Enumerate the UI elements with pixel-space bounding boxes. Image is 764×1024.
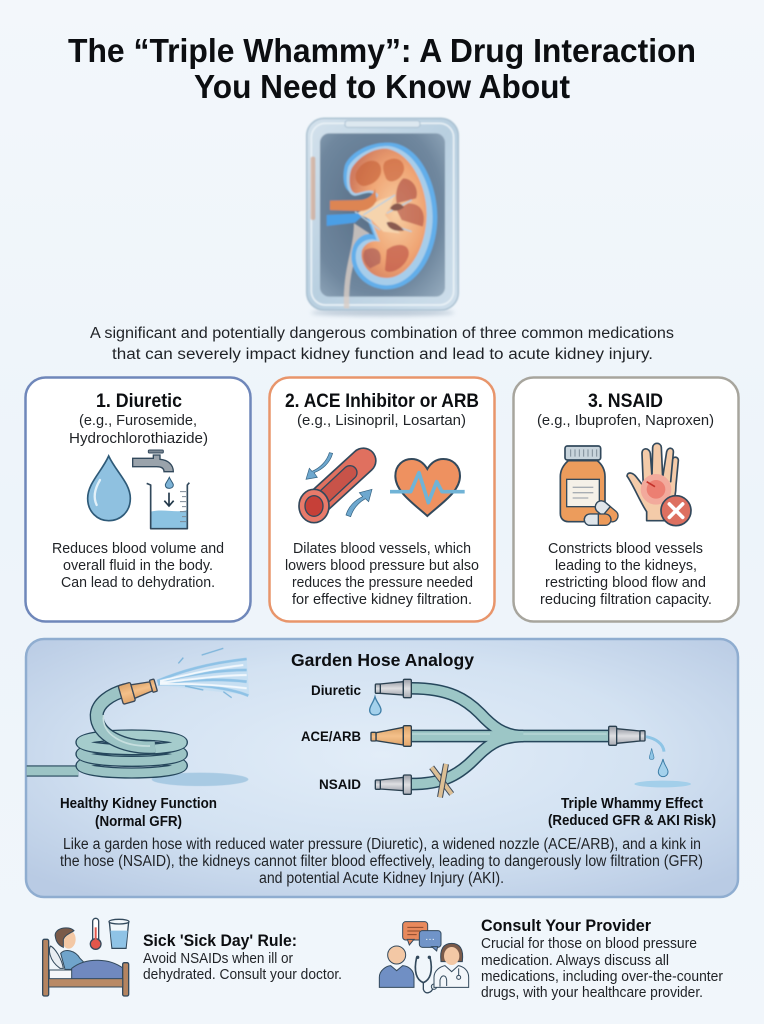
description: diuretic: Reduces blood volume and: [52, 541, 224, 557]
heading: sick day rule: Sick 'Sick Day' Rule:: [143, 931, 297, 950]
heading: diuretic: 1. Diuretic: [96, 390, 182, 412]
caption: triple whammy effect: (Reduced GFR & AKI Risk): [548, 813, 716, 829]
icon: water drop and faucet with beaker: [88, 450, 189, 529]
panel: diuretic: [26, 378, 250, 622]
description: ace: Dilates blood vessels, which: [293, 541, 471, 557]
heading: consult your provider: Consult Your Provider: [481, 916, 651, 935]
label: nsaid: NSAID: [319, 777, 361, 792]
explanation text: the hose (NSAID), the kidneys cannot filter blood effectively, leading to dangerously low filtration (GFR): [60, 853, 703, 870]
panel: nsaid: [514, 378, 738, 622]
description: ace: [285, 541, 479, 608]
description: nsaid: reducing filtration capacity.: [540, 592, 712, 608]
text: sick day advice: [143, 950, 342, 983]
illustration: kidney in glass tray: [307, 118, 458, 316]
description: diuretic: overall fluid in the body.: [63, 558, 213, 574]
description: ace: for effective kidney filtration.: [292, 592, 472, 608]
text: consult advice: drugs, with your healthcare provider.: [481, 984, 703, 1001]
label: ace/arb: ACE/ARB: [301, 729, 361, 744]
text: sick day advice: Avoid NSAIDs when ill or: [143, 950, 293, 967]
description: ace: reduces the pressure needed: [292, 575, 473, 591]
caption: healthy kidney function: (Normal GFR): [95, 814, 182, 830]
description: nsaid: [540, 541, 712, 608]
label: diuretic: Diuretic: [311, 683, 361, 698]
description: nsaid: Constricts blood vessels: [548, 541, 703, 557]
text: consult advice: Crucial for those on blood pressure: [481, 935, 697, 952]
description: nsaid: restricting blood flow and: [545, 575, 706, 591]
subheading: diuretic examples: Hydrochlorothiazide): [69, 430, 208, 447]
caption: healthy kidney function: Healthy Kidney Function: [60, 796, 217, 812]
illustration: healthy hose: [27, 648, 249, 786]
section: consult your provider: [379, 916, 723, 1001]
explanation text: Like a garden hose with reduced water pressure (Diuretic), a widened nozzle (ACE/ARB), and a kink in: [63, 836, 701, 853]
description: diuretic: Can lead to dehydration.: [61, 575, 215, 591]
title: [68, 32, 696, 105]
text: consult advice: medication. Always discuss all: [481, 952, 669, 969]
subheading: nsaid examples: (e.g., Ibuprofen, Naproxen): [537, 412, 714, 429]
caption: healthy kidney function: [60, 796, 217, 830]
subheading: ace examples: (e.g., Lisinopril, Losartan): [297, 412, 466, 429]
text: consult advice: [481, 935, 723, 1001]
heading: ace inhibitor: 2. ACE Inhibitor or ARB: [285, 390, 479, 412]
subheading: diuretic examples: (e.g., Furosemide,: [79, 412, 197, 429]
heading: garden hose analogy: Garden Hose Analogy: [291, 650, 474, 670]
icon: dilated blood vessel: [299, 453, 372, 523]
caption: triple whammy effect: [548, 796, 716, 829]
intro text: A significant and potentially dangerous combination of three common medications: [90, 325, 674, 342]
title: The “Triple Whammy”: A Drug Interaction: [68, 32, 696, 69]
explanation text: and potential Acute Kidney Injury (AKI).: [259, 870, 504, 887]
description: diuretic: [52, 541, 224, 591]
icon: patient in bed with thermometer and water: [43, 918, 129, 996]
icon: pill bottle and capsules: [560, 446, 620, 525]
icon: patient and doctor with speech bubbles: [379, 922, 469, 993]
panel: garden hose analogy: [26, 639, 738, 897]
section: sick day rule: [43, 918, 342, 996]
text: consult advice: medications, including over-the-counter: [481, 968, 723, 985]
description: ace: lowers blood pressure but also: [285, 558, 479, 574]
icon: painful hand with cross badge: [627, 443, 691, 526]
text: sick day advice: dehydrated. Consult your doctor.: [143, 966, 342, 983]
description: nsaid: leading to the kidneys,: [555, 558, 697, 574]
subheading: diuretic examples: [69, 412, 208, 447]
heading: nsaid: 3. NSAID: [588, 390, 663, 412]
intro text: that can severely impact kidney function and lead to acute kidney injury.: [112, 346, 653, 363]
intro text: [90, 325, 674, 363]
icon: heart with pulse: [390, 459, 465, 516]
explanation text: [60, 836, 703, 887]
panel: ace inhibitor or arb: [270, 378, 494, 622]
caption: triple whammy effect: Triple Whammy Effect: [561, 796, 703, 812]
illustration: triple whammy hose: [370, 679, 691, 797]
title: You Need to Know About: [194, 68, 570, 105]
